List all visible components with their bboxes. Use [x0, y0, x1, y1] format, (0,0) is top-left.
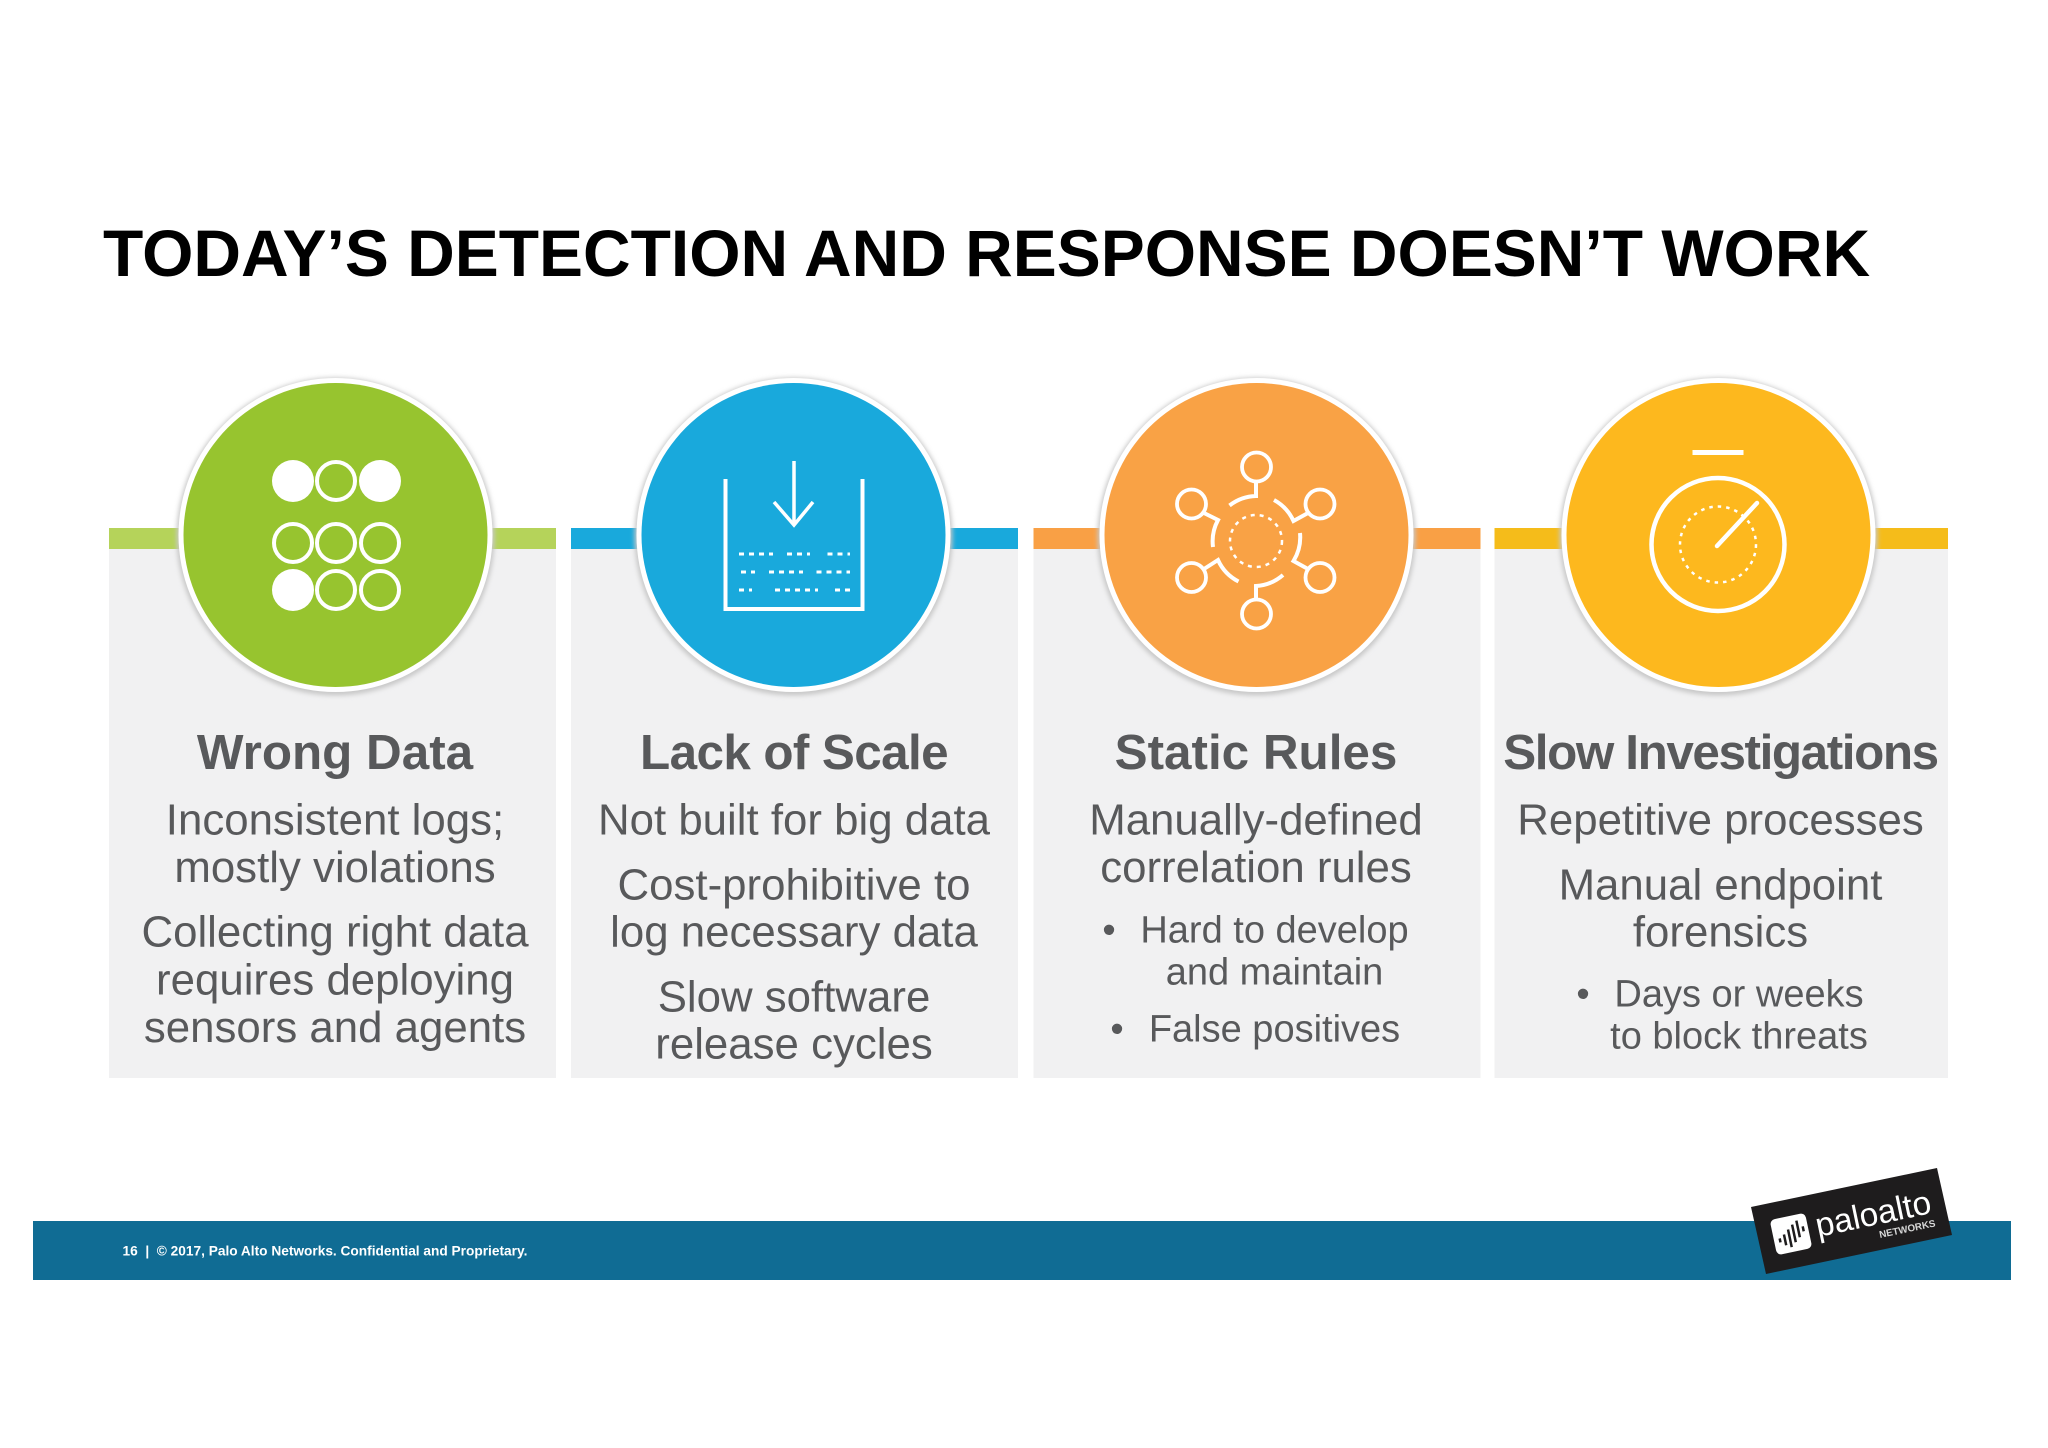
body text: wrong data: Inconsistent logs;: [166, 796, 504, 844]
accent bar: [1034, 528, 1480, 549]
heading: static rules: Static Rules: [1115, 725, 1397, 780]
icon: stopwatch: [1652, 450, 1784, 611]
circle badge: [1098, 378, 1416, 696]
logo: palo alto networks: [1751, 1168, 1952, 1274]
icon: data dots grid: [272, 460, 401, 611]
panel: static rules: [1034, 378, 1480, 1078]
icon: bucket with arrow: [726, 461, 862, 609]
body text: lack of scale: Slow software: [658, 972, 930, 1022]
footer band: [33, 1221, 2011, 1280]
title: TODAY’S DETECTION AND RESPONSE DOESN’T WORK: [103, 216, 1870, 290]
body text: wrong data: Collecting right data: [141, 908, 529, 956]
body text: slow investigations: •: [1576, 974, 1590, 1016]
logo: palo alto networks: paloalto: [1812, 1184, 1934, 1245]
heading: lack of scale: Lack of Scale: [640, 725, 948, 780]
panel background: [1034, 548, 1480, 1078]
body text: static rules: •: [1102, 910, 1116, 952]
circle badge: [634, 378, 952, 696]
accent bar: [109, 528, 556, 549]
footer text: 16 | © 2017, Palo Alto Networks. Confidential and Proprietary.: [122, 1244, 527, 1258]
panel background: [1494, 548, 1948, 1078]
logo: palo alto networks: NETWORKS: [1878, 1218, 1937, 1241]
panel: wrong data: [109, 378, 556, 1078]
body text: static rules: Manually-defined: [1089, 796, 1423, 844]
heading: wrong data: Wrong Data: [197, 725, 474, 780]
accent bar: [571, 528, 1018, 549]
body text: wrong data: requires deploying: [156, 956, 514, 1004]
panel background: [571, 548, 1018, 1078]
body text: static rules: and maintain: [1166, 952, 1383, 994]
body text: lack of scale: log necessary data: [610, 908, 978, 956]
body text: lack of scale: [598, 796, 991, 1068]
body text: slow investigations: Days or weeks: [1614, 974, 1864, 1016]
body text: slow investigations: forensics: [1633, 908, 1808, 956]
body text: slow investigations: to block threats: [1610, 1016, 1868, 1058]
panel background: [109, 548, 556, 1078]
icon: network hub: [1177, 452, 1334, 628]
panel: slow investigations: [1494, 378, 1948, 1078]
circle badge: [176, 378, 494, 696]
body text: static rules: False positives: [1149, 1008, 1400, 1050]
body text: lack of scale: Not built for big data: [598, 796, 991, 844]
body text: slow investigations: [1517, 796, 1924, 1058]
body text: slow investigations: Repetitive processes: [1517, 796, 1924, 844]
heading: slow investigations: Slow Investigations: [1503, 725, 1938, 780]
body text: lack of scale: release cycles: [655, 1020, 933, 1068]
body text: wrong data: mostly violations: [174, 843, 496, 892]
body text: static rules: •: [1110, 1008, 1124, 1050]
body text: wrong data: sensors and agents: [144, 1003, 526, 1052]
body text: static rules: [1089, 796, 1423, 1050]
circle badge: [1560, 378, 1878, 696]
body text: lack of scale: Cost-prohibitive to: [618, 860, 970, 910]
body text: wrong data: [141, 796, 529, 1052]
body text: slow investigations: Manual endpoint: [1559, 860, 1882, 910]
panel: lack of scale: [571, 378, 1018, 1078]
accent bar: [1494, 528, 1948, 549]
body text: static rules: correlation rules: [1100, 843, 1412, 892]
body text: static rules: Hard to develop: [1140, 910, 1409, 952]
